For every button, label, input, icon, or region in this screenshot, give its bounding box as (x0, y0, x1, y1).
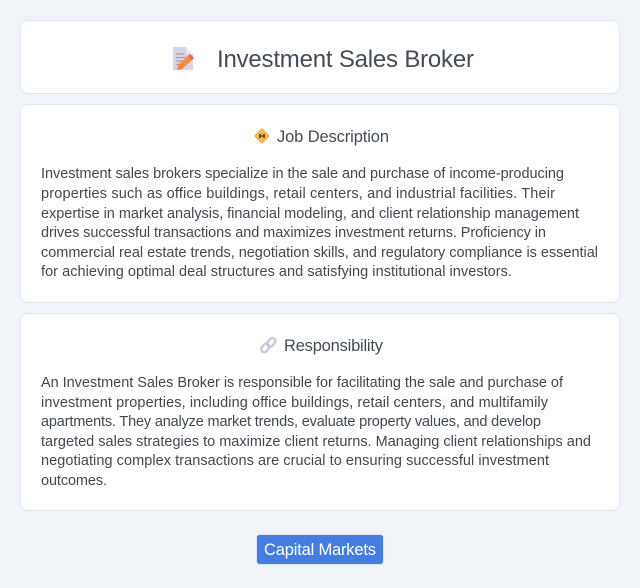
tag button: capital markets: Capital Markets (264, 541, 376, 559)
tag button: capital markets (256, 534, 384, 564)
panel: title card (20, 20, 620, 94)
text block: job description: commercial real estate trends, negotiation skills, and regulatory compliance is essential (41, 245, 598, 261)
text block: responsibility: An Investment Sales Broker is responsible for facilitating the sale and purchase of (41, 375, 564, 391)
text block: responsibility: investment properties, including office buildings, retail centers, and multifamily (41, 395, 549, 411)
text block: job description: properties such as office buildings, retail centers, and industrial facilities. Their (41, 186, 555, 202)
icon: orange diamond (254, 128, 270, 144)
title: Investment Sales Broker (217, 46, 474, 73)
icon: chain link (260, 337, 277, 354)
text block: responsibility: apartments. They analyze market trends, evaluate property values, and develop (41, 414, 541, 430)
heading: job description: Job Description (277, 128, 389, 146)
text block: responsibility (41, 375, 591, 489)
panel: responsibility (20, 314, 620, 510)
text block: job description: drives successful transactions and maximizes investment returns. Proficiency in (41, 225, 546, 241)
text block: responsibility: targeted sales strategies to maximize client returns. Managing client relationships and (41, 434, 591, 450)
text block: job description: expertise in market analysis, financial modeling, and client relationship management (41, 206, 579, 222)
heading: responsibility: Responsibility (284, 337, 384, 355)
text block: responsibility: negotiating complex transactions are crucial to ensuring successful investment (41, 453, 549, 469)
icon: document with pencil (173, 47, 194, 70)
text block: responsibility: outcomes. (41, 473, 107, 489)
text block: job description (41, 166, 598, 280)
text block: job description: for achieving optimal deal structures and satisfying institutional investors. (41, 264, 512, 280)
text block: job description: Investment sales brokers specialize in the sale and purchase of income-producing (41, 166, 564, 182)
panel: job description (20, 104, 620, 302)
